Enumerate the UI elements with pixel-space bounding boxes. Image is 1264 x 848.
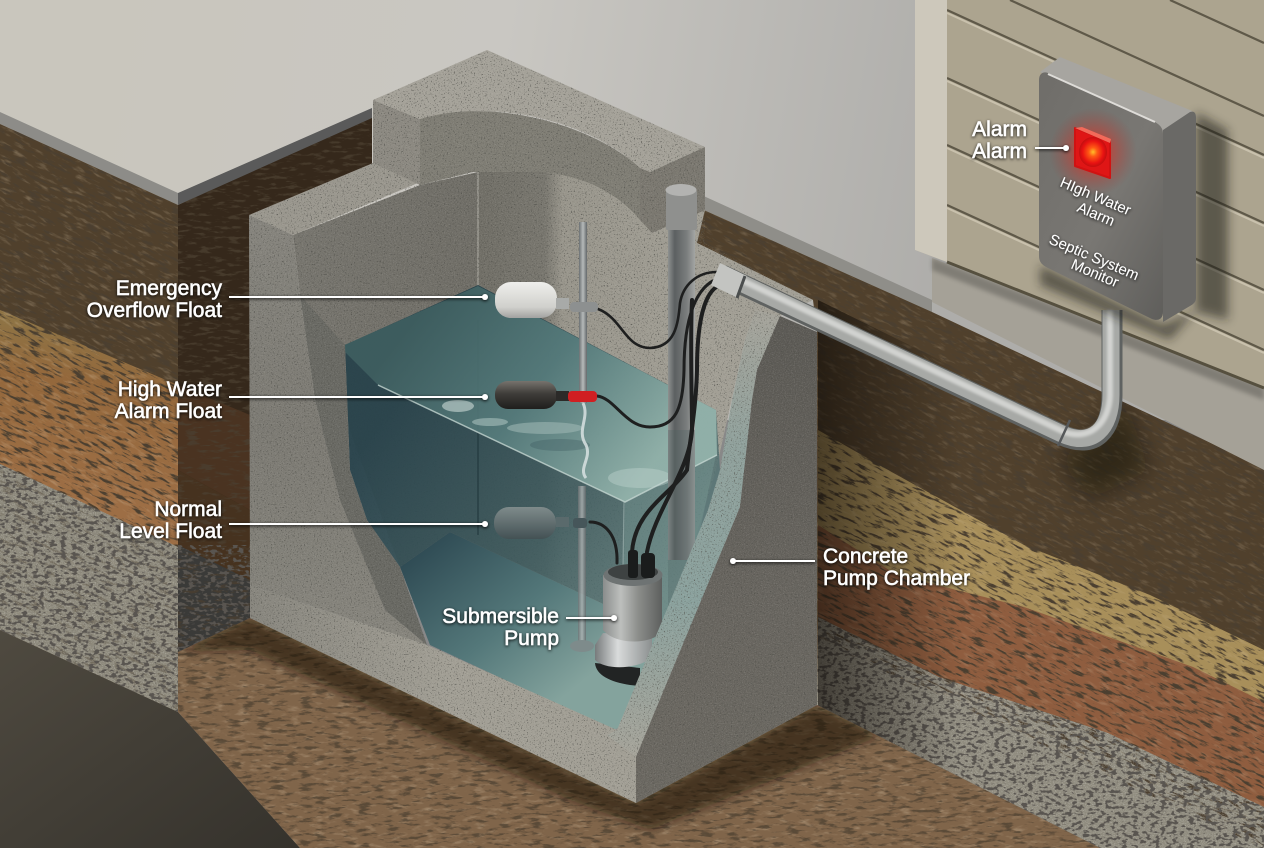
collar top bbox=[373, 50, 705, 172]
chamber front cut faces bbox=[249, 215, 817, 803]
collar right block bbox=[640, 147, 705, 233]
float guide rod bbox=[570, 222, 594, 652]
left cut face bbox=[249, 215, 427, 645]
box text: HIgh Water bbox=[1057, 174, 1133, 219]
label: concrete pump chamber: Pump Chamber bbox=[823, 567, 970, 590]
alarm box bbox=[1039, 57, 1196, 322]
label: alarm: Alarm bbox=[972, 140, 1027, 163]
water body bbox=[345, 285, 720, 730]
label: high water alarm float: High Water bbox=[118, 378, 222, 401]
label: emergency overflow float: Overflow Float bbox=[87, 299, 222, 322]
back wall right bbox=[478, 168, 813, 720]
back wall left bbox=[293, 172, 478, 567]
house foundation bbox=[932, 258, 1264, 470]
label: high water alarm float: Alarm Float bbox=[115, 400, 222, 423]
collar arch face bbox=[420, 111, 640, 220]
box text bbox=[1046, 174, 1141, 291]
alarm box shadow bbox=[1040, 112, 1228, 340]
label: alarm bbox=[972, 118, 1069, 163]
label: high water alarm float bbox=[115, 378, 488, 423]
float: emergency overflow bbox=[495, 282, 598, 318]
right lip bbox=[607, 310, 780, 757]
inner side strip bbox=[300, 295, 427, 645]
label: submersible pump: Submersible bbox=[442, 605, 559, 628]
water surface bbox=[340, 286, 717, 502]
label: emergency overflow float bbox=[87, 277, 488, 322]
bottom slab bbox=[250, 585, 636, 803]
label: normal level float: Level Float bbox=[119, 520, 222, 543]
right soil cross-section bbox=[690, 190, 1264, 848]
wall top rim bbox=[249, 163, 418, 235]
label: submersible pump: Pump bbox=[504, 627, 559, 650]
red alarm lamp bbox=[1075, 127, 1111, 178]
box text: Monitor bbox=[1068, 256, 1121, 291]
floor bbox=[400, 532, 680, 730]
float cables bbox=[590, 272, 720, 563]
box text: Septic System bbox=[1046, 231, 1141, 284]
chamber back walls and collar bbox=[249, 50, 813, 720]
house siding wall bbox=[915, 0, 1264, 388]
submersible pump bbox=[595, 550, 662, 686]
bottom soil floor bbox=[178, 610, 1108, 848]
right main face bbox=[636, 316, 817, 803]
float: high water alarm bbox=[495, 381, 597, 409]
float: normal level bbox=[494, 507, 587, 539]
label: alarm: Alarm bbox=[972, 118, 1027, 141]
label: emergency overflow float: Emergency bbox=[116, 277, 222, 300]
label: normal level float: Normal bbox=[154, 498, 222, 521]
corner trim bbox=[915, 0, 947, 262]
collar left block bbox=[373, 100, 420, 185]
label: concrete pump chamber: Concrete bbox=[823, 545, 908, 568]
label: normal level float bbox=[119, 498, 488, 543]
label: concrete pump chamber bbox=[730, 545, 970, 590]
slab edges bbox=[0, 108, 932, 314]
lower dark plane bbox=[0, 630, 300, 848]
pipe to alarm box bbox=[711, 263, 1112, 446]
left soil cross-section bbox=[0, 110, 180, 720]
ground surface plane bbox=[0, 0, 1264, 420]
label: submersible pump bbox=[442, 605, 617, 650]
box text: Alarm bbox=[1074, 199, 1117, 230]
corner edge bbox=[477, 172, 479, 300]
soil behind chamber (shaded) bbox=[178, 110, 378, 655]
vertical conduit bbox=[666, 184, 697, 650]
